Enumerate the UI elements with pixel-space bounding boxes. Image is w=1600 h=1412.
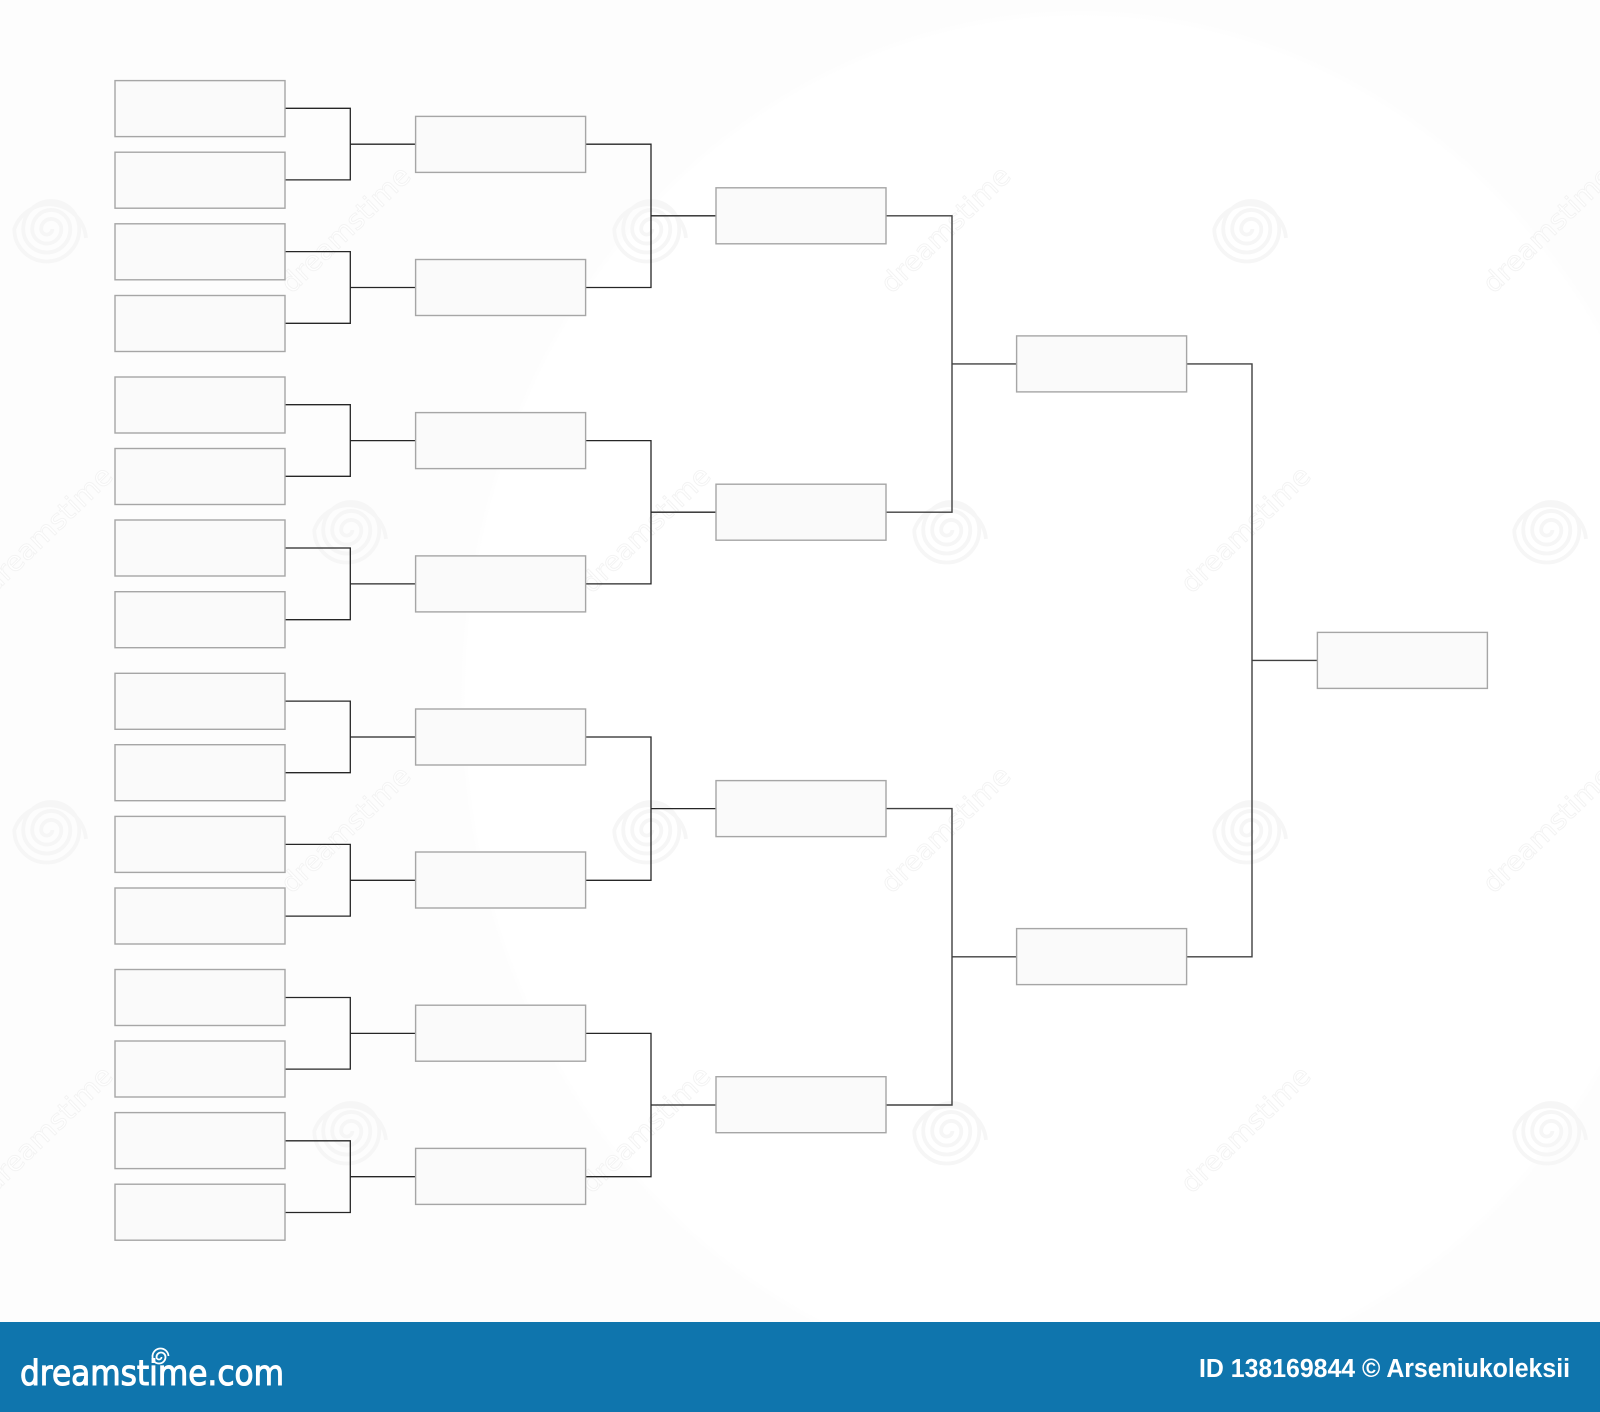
round 1 box 13 — [115, 970, 285, 1026]
round 1 box 10 — [115, 745, 285, 801]
round 3 column — [716, 188, 886, 1133]
icon: logo spiral — [152, 1348, 168, 1364]
round 1 box 11 — [115, 816, 285, 872]
round 1 box 4 — [115, 296, 285, 352]
round 2 box 2 — [416, 260, 586, 316]
watermark layer — [0, 160, 1600, 1199]
round 1 box 9 — [115, 673, 285, 729]
round 1 box 14 — [115, 1041, 285, 1097]
round 2 box 8 — [416, 1148, 586, 1204]
round 2 box 4 — [416, 556, 586, 612]
round 1 box 6 — [115, 448, 285, 504]
round 1 box 12 — [115, 888, 285, 944]
logo: dreamstime.com: dreamstime.com — [20, 1354, 284, 1394]
watermark layer: dreamstime — [875, 160, 1017, 299]
round 2 box 6 — [416, 852, 586, 908]
watermark layer: dreamstime — [1175, 460, 1317, 599]
round 2 box 5 — [416, 709, 586, 765]
round 3 box 3 — [716, 781, 886, 837]
watermark layer: dreamstime — [575, 1060, 717, 1199]
watermark layer: dreamstime — [575, 460, 717, 599]
round 1 box 1 — [115, 81, 285, 137]
round 2 box 1 — [416, 116, 586, 172]
round 3 box 2 — [716, 484, 886, 540]
round 3 box 1 — [716, 188, 886, 244]
round 4 column — [1017, 336, 1187, 985]
round 1 box 8 — [115, 592, 285, 648]
round 1 box 3 — [115, 224, 285, 280]
watermark layer: dreamstime — [875, 760, 1017, 899]
round 2 box 3 — [416, 413, 586, 469]
round 1 box 5 — [115, 377, 285, 433]
final box — [1317, 632, 1487, 688]
round 2 column — [416, 116, 586, 1204]
connector: round 4 to final — [1187, 364, 1317, 957]
round 1 box 15 — [115, 1113, 285, 1169]
round 1 box 16 — [115, 1184, 285, 1240]
round 1 box 7 — [115, 520, 285, 576]
watermark layer: dreamstime — [1175, 1060, 1317, 1199]
watermark layer: dreamstime — [275, 160, 417, 299]
connectors: round 2 to round 3 — [586, 144, 716, 1177]
connectors: round 3 to round 4 — [886, 216, 1017, 1105]
round 2 box 7 — [416, 1005, 586, 1061]
round 3 box 4 — [716, 1077, 886, 1133]
round 4 box 1 — [1017, 336, 1187, 392]
connectors: round 1 to round 2 — [285, 108, 416, 1212]
footer bar — [0, 1322, 1600, 1412]
round 4 box 2 — [1017, 929, 1187, 985]
image id and credit: ID 138169844 © Arseniukoleksii — [1199, 1355, 1570, 1383]
round 1 box 2 — [115, 152, 285, 208]
round 1 column — [115, 81, 285, 1240]
watermark layer: dreamstime — [275, 760, 417, 899]
